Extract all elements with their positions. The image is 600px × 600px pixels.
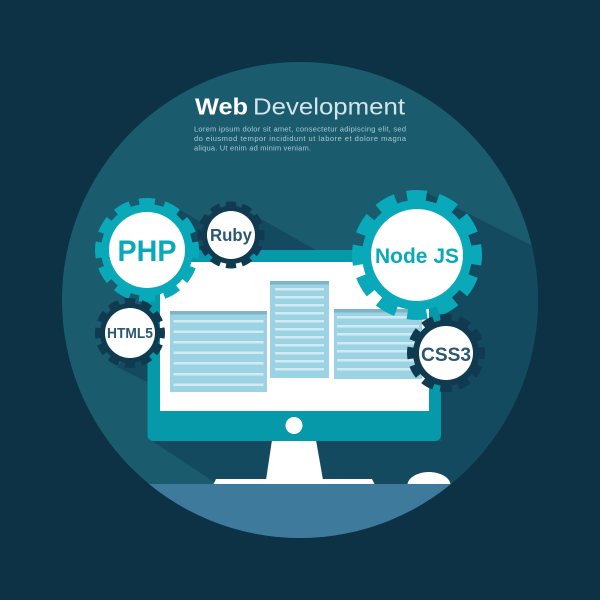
title: [195, 94, 406, 120]
screen: [160, 262, 429, 411]
window right: [334, 309, 422, 379]
gear: CSS3: CSS3: [421, 344, 471, 366]
gear: PHP: PHP: [118, 235, 176, 268]
infographic: [62, 62, 538, 538]
gear: Ruby: [201, 205, 261, 265]
monitor: [148, 250, 441, 484]
window left: [170, 311, 267, 392]
keyboard: [214, 479, 374, 484]
mouse: [408, 472, 450, 484]
power button: [286, 417, 302, 434]
description text: aliqua. Ut enim ad minim veniam.: [194, 144, 311, 152]
window middle: [270, 281, 329, 378]
gear: HTML5: HTML5: [107, 326, 153, 342]
gear: CSS3: [411, 318, 481, 388]
monitor bezel: [148, 250, 441, 441]
long shadows: [117, 193, 538, 484]
circular panel: [62, 62, 538, 538]
gear: HTML5: [98, 302, 162, 364]
description text: do eiusmod tempor incididunt ut labore et dolore magna: [194, 134, 407, 143]
title: Web: [195, 94, 248, 120]
floor: [149, 484, 451, 538]
gear: PHP: [100, 203, 194, 297]
gear: Node JS: [358, 196, 476, 314]
monitor stand: [266, 440, 323, 480]
title: Development: [253, 94, 406, 120]
gear: Ruby: Ruby: [210, 225, 252, 245]
description text: [194, 124, 407, 152]
gear: Node JS: Node JS: [375, 245, 459, 268]
description text: Lorem ipsum dolor sit amet, consectetur adipiscing elit, sed: [194, 124, 406, 134]
